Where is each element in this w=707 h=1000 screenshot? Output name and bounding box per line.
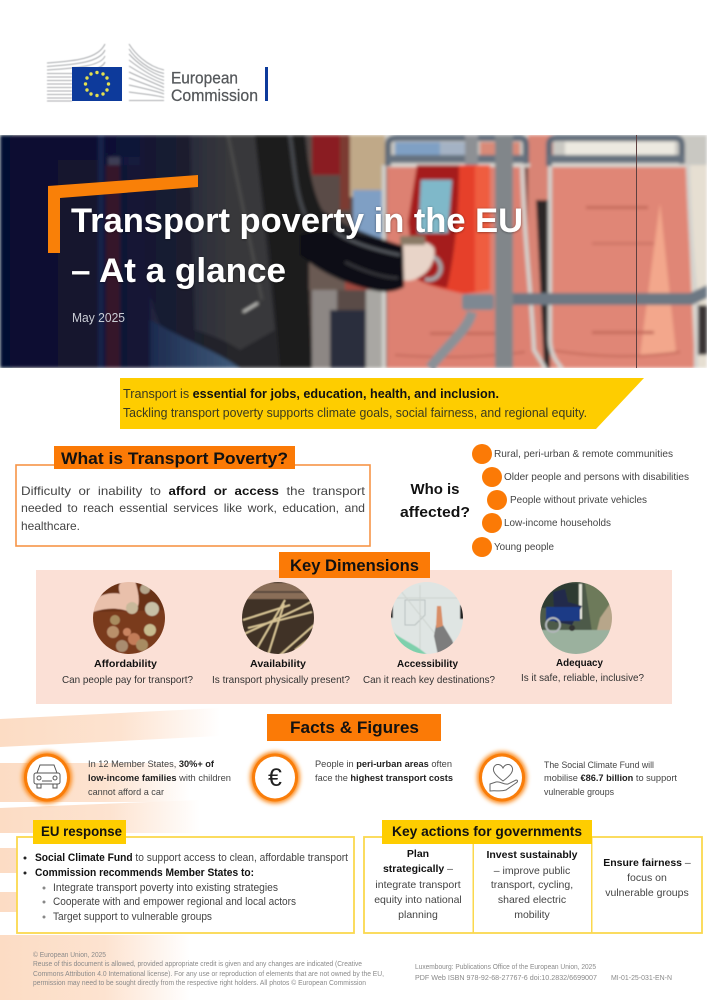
footer: publication details: MI-01-25-031-EN-N xyxy=(611,975,672,982)
column: invest sustainably xyxy=(486,849,578,921)
caption: affordability: Can people pay for transport? xyxy=(62,674,193,686)
definition text xyxy=(21,484,366,533)
vertical pole xyxy=(495,135,513,368)
fact text: face the highest transport costs xyxy=(315,773,453,784)
fact text: low-income families with children xyxy=(88,773,231,784)
window strips xyxy=(385,135,707,165)
column: invest sustainably: – improve public xyxy=(494,865,570,877)
footer: legal notice: © European Union, 2025 xyxy=(33,951,106,959)
orange bracket xyxy=(48,175,198,253)
caption: availability: Is transport physically present? xyxy=(212,674,350,686)
fact text xyxy=(544,760,677,798)
dark gap between seats xyxy=(536,200,550,368)
heading xyxy=(33,820,126,844)
icon: EU flag xyxy=(72,67,122,101)
caption: affordability: Affordability xyxy=(94,658,157,670)
footer: publication details: PDF Web ISBN 978-92-68-27767-6 doi:10.2832/6699007 xyxy=(415,975,597,982)
fact text: The Social Climate Fund will xyxy=(544,760,654,771)
caption: availability: Availability xyxy=(250,658,306,670)
panel: what is transport poverty xyxy=(16,446,370,546)
logo: European Commission xyxy=(47,44,268,105)
right seat xyxy=(553,167,695,368)
lower diagonal pole xyxy=(430,312,472,368)
caption: adequacy: Is it safe, reliable, inclusive? xyxy=(521,672,644,684)
dark navy left area xyxy=(0,135,150,368)
caption: accessibility: Can it reach key destinations? xyxy=(363,674,495,686)
list: affected groups: Low-income households xyxy=(504,517,611,529)
column: invest sustainably: mobility xyxy=(514,909,551,921)
heading xyxy=(279,552,430,578)
footer: legal notice: Reuse of this document is allowed, provided appropriate credit is given and any changes are indicated (Creative xyxy=(33,961,362,968)
caption: accessibility xyxy=(363,658,495,686)
footer: publication details xyxy=(415,964,672,982)
caption: availability xyxy=(212,658,350,686)
jacket xyxy=(138,135,404,368)
footer: legal notice: Commons Attribution 4.0 International license). For any use or reproduction of elements that are not owned by the EU, xyxy=(33,971,384,978)
terminal xyxy=(427,162,478,295)
list: affected groups: Older people and persons with disabilities xyxy=(504,471,689,483)
bullet list: Target support to vulnerable groups xyxy=(53,911,212,923)
footer: publication details: Luxembourg: Publications Office of the European Union, 2025 xyxy=(415,964,596,971)
fact text: cannot afford a car xyxy=(88,787,164,798)
caption: adequacy xyxy=(521,657,644,684)
fact: euro xyxy=(250,752,453,804)
heading xyxy=(54,446,295,469)
logo wordmark: Commission xyxy=(171,87,258,105)
banner: Transport is essential for jobs, education, health, and inclusion. xyxy=(123,387,499,401)
icon: heart in hand xyxy=(477,752,527,804)
hand xyxy=(403,241,435,281)
seat frames xyxy=(384,165,696,368)
logo wordmark xyxy=(171,70,258,105)
navy fade over jacket xyxy=(119,135,216,368)
left seat xyxy=(387,167,535,368)
banner xyxy=(120,378,644,429)
logo wordmark: European xyxy=(171,70,238,88)
column: plan strategically: equity into national xyxy=(374,894,462,906)
who is affected heading: Who is xyxy=(410,481,460,498)
definition text: Difficulty or inability to afford or access the transport xyxy=(21,484,366,498)
title xyxy=(71,202,523,290)
title: – At a glance xyxy=(71,252,286,290)
who is affected heading: affected? xyxy=(400,504,470,521)
icon: car xyxy=(22,752,72,804)
panel: key dimensions xyxy=(36,552,672,704)
heading: facts and figures: Facts & Figures xyxy=(290,719,419,737)
column: plan strategically: planning xyxy=(398,909,438,921)
horizontal bar xyxy=(513,285,707,305)
heading: facts and figures xyxy=(267,714,441,741)
definition text: healthcare. xyxy=(21,519,80,533)
fact text: People in peri-urban areas often xyxy=(315,759,452,770)
caption: accessibility: Accessibility xyxy=(397,658,458,670)
list: affected groups: Young people xyxy=(494,541,554,553)
sleeve xyxy=(300,232,404,292)
bullet list: Integrate transport poverty into existing strategies xyxy=(53,882,278,894)
photo: wheelchair user xyxy=(540,582,612,654)
column: ensure fairness: focus on xyxy=(627,872,667,884)
banner: Tackling transport poverty supports climate goals, social fairness, and regional equity. xyxy=(123,406,587,420)
fact text xyxy=(315,759,453,784)
icon: euro xyxy=(250,752,300,804)
fact text: mobilise €86.7 billion to support xyxy=(544,773,677,784)
column: ensure fairness xyxy=(603,857,691,899)
footer: legal notice xyxy=(33,951,384,987)
background between jacket and seat xyxy=(307,136,365,312)
column: plan strategically: strategically – xyxy=(383,863,453,875)
icon: euro: € xyxy=(268,764,282,792)
fact text xyxy=(88,759,231,798)
heading xyxy=(382,820,592,844)
column: invest sustainably: shared electric xyxy=(498,894,566,906)
bullet list: Commission recommends Member States to: xyxy=(35,867,254,879)
list: affected groups: People without private vehicles xyxy=(510,494,647,506)
fact text: vulnerable groups xyxy=(544,787,614,798)
photo: rail tracks xyxy=(242,582,314,654)
column: plan strategically xyxy=(374,848,462,921)
caption: affordability xyxy=(62,658,193,686)
hero photo xyxy=(0,135,707,368)
bullet list: Social Climate Fund to support access to clean, affordable transport xyxy=(35,852,348,864)
heading: Key actions for governments xyxy=(392,823,582,839)
bullet list: Cooperate with and empower regional and local actors xyxy=(53,896,296,908)
caption: adequacy: Adequacy xyxy=(556,657,603,669)
who is affected heading xyxy=(400,481,470,521)
column: plan strategically: Plan xyxy=(407,848,429,860)
column: invest sustainably: Invest sustainably xyxy=(486,849,578,861)
jeans xyxy=(150,320,245,368)
background stripes xyxy=(0,708,220,1000)
fact: car xyxy=(22,752,231,804)
vertical small pole xyxy=(465,135,478,165)
column: ensure fairness: vulnerable groups xyxy=(605,887,689,899)
icon: right building xyxy=(129,44,164,100)
title: Transport poverty in the EU xyxy=(71,202,523,240)
definition text: needed to reach essential services like work, education, and xyxy=(21,501,365,515)
photo: map xyxy=(391,582,463,654)
column: invest sustainably: transport, cycling, xyxy=(491,879,573,891)
panel: key actions for governments xyxy=(364,820,702,933)
heading: EU response xyxy=(41,823,122,839)
heading: What is Transport Poverty? xyxy=(61,450,288,468)
panel: EU response xyxy=(17,820,354,933)
list: affected groups: Rural, peri-urban & remote communities xyxy=(494,448,673,460)
photo: coins xyxy=(93,582,165,654)
fact: social climate fund xyxy=(477,752,677,804)
bullet list xyxy=(24,852,348,923)
footer: legal notice: permission may need to be sought directly from the respective right holders. All photos © European Commission xyxy=(33,979,366,987)
date: May 2025 xyxy=(72,311,125,325)
list: affected groups xyxy=(472,444,689,557)
column: ensure fairness: Ensure fairness – xyxy=(603,857,691,869)
heading: Key Dimensions xyxy=(290,557,419,575)
fact text: In 12 Member States, 30%+ of xyxy=(88,759,215,770)
column: plan strategically: integrate transport xyxy=(375,879,461,891)
icon: left building xyxy=(47,44,105,101)
background right of seats xyxy=(688,162,707,368)
